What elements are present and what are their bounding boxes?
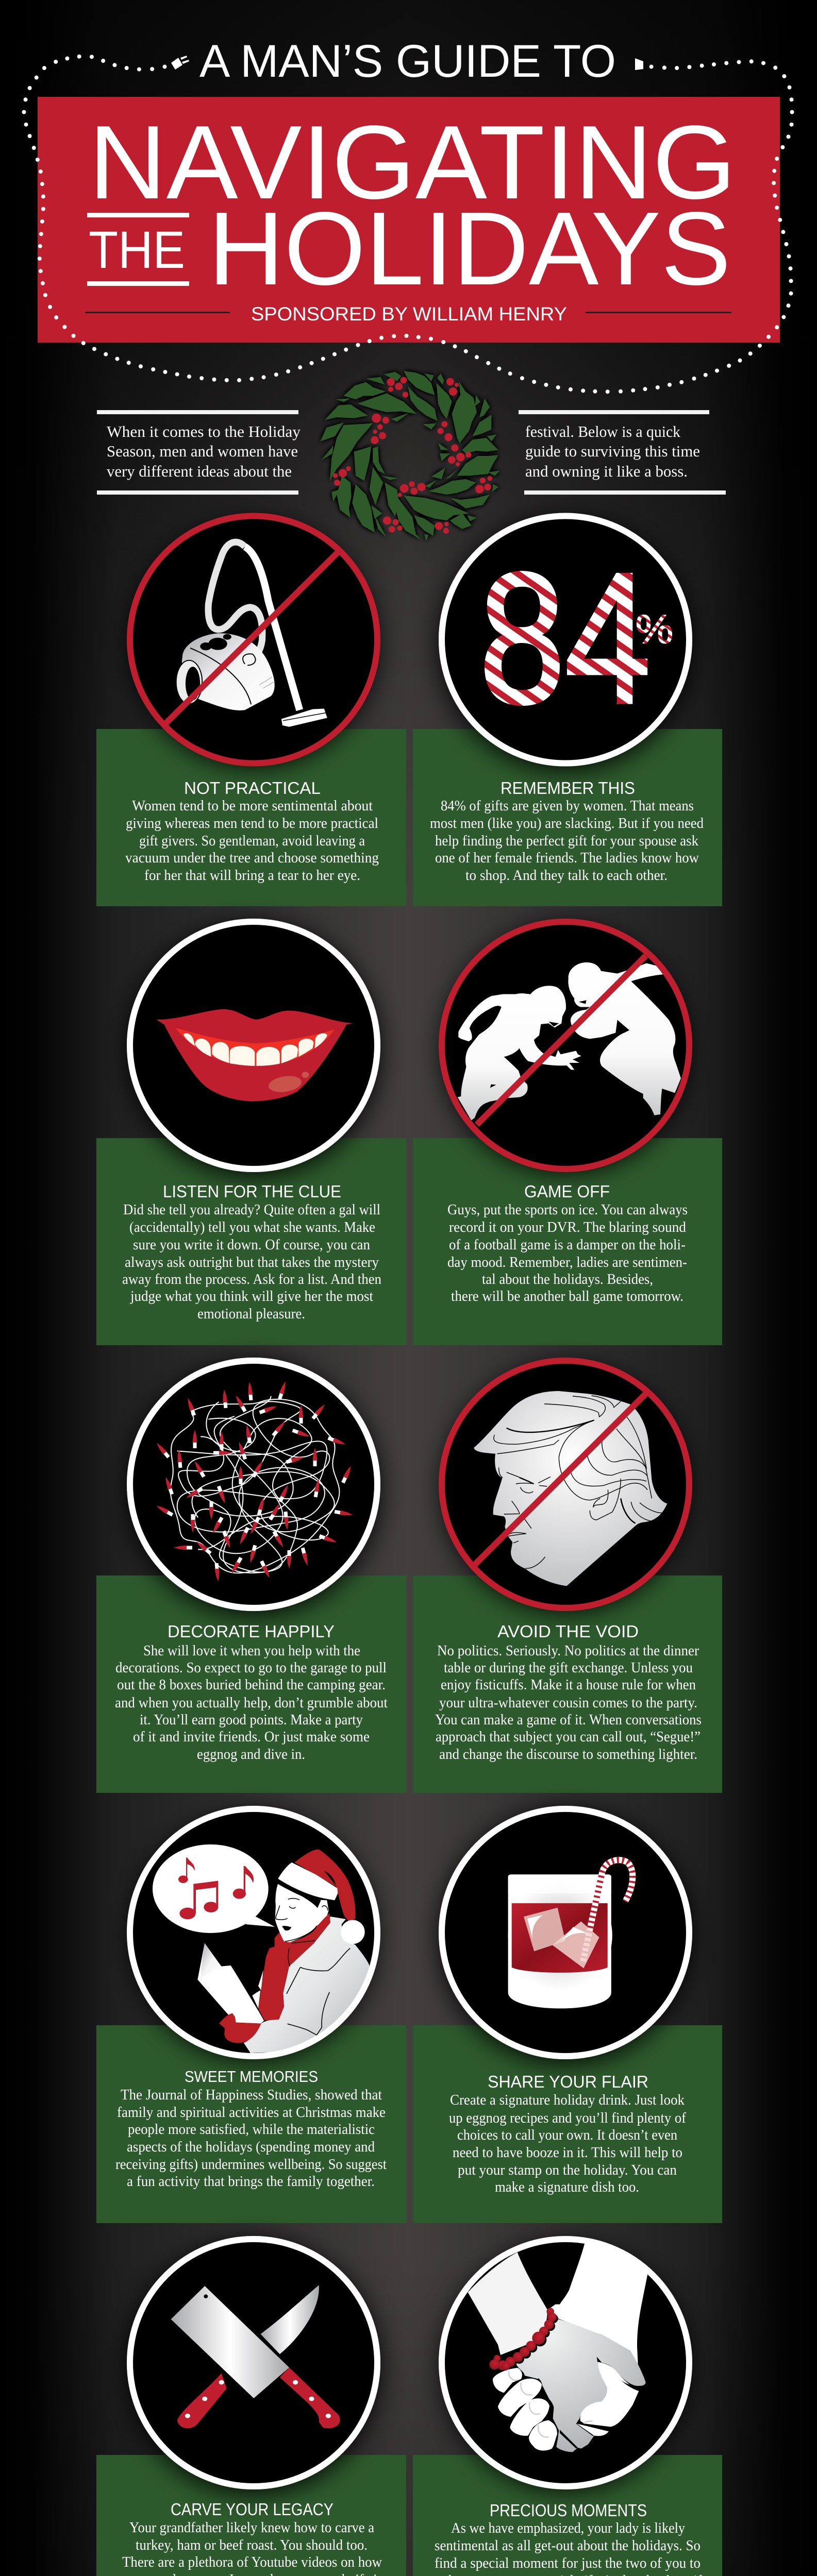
body text: 84% of gifts are given by women. That means bbox=[441, 798, 694, 814]
body text: emotional pleasure. bbox=[197, 1306, 305, 1322]
body text bbox=[125, 798, 379, 884]
body text bbox=[115, 2087, 387, 2190]
body text: of a football game is a damper on the holi- bbox=[449, 1236, 686, 1253]
coat bbox=[244, 1917, 370, 2053]
card background bbox=[96, 1575, 406, 1793]
sponsor line bbox=[85, 303, 731, 325]
heading: DECORATE HAPPILY bbox=[168, 1622, 335, 1641]
title: the: THE bbox=[89, 221, 185, 279]
body text: Women tend to be more sentimental about bbox=[132, 798, 373, 814]
song book bbox=[197, 1943, 264, 2024]
heading: LISTEN FOR THE CLUE bbox=[163, 1182, 341, 1201]
heading: NOT PRACTICAL bbox=[184, 778, 321, 798]
heading: PRECIOUS MOMENTS bbox=[490, 2501, 647, 2520]
body text: You can make a game of it. When conversations bbox=[435, 1711, 702, 1728]
intro text left: Season, men and women have bbox=[107, 442, 298, 460]
panel: precious moments bbox=[413, 2239, 722, 2576]
body text: There are a plethora of Youtube videos on how bbox=[122, 2554, 382, 2570]
body text: help finding the perfect gift for your spouse ask bbox=[435, 833, 698, 849]
icon: red lips bbox=[130, 922, 377, 1169]
body text bbox=[447, 1201, 688, 1304]
body text: need to have booze in it. This will help to bbox=[453, 2144, 682, 2161]
fingers bbox=[518, 2368, 558, 2448]
card background bbox=[96, 2455, 406, 2576]
bracelet bbox=[489, 2308, 558, 2370]
body text: sure you write it down. Of course, you can bbox=[133, 1236, 370, 1253]
heading: SWEET MEMORIES bbox=[185, 2067, 318, 2086]
icon: tangled lights bbox=[130, 1361, 377, 1608]
body text: aspects of the holidays (spending money and bbox=[127, 2139, 375, 2155]
body text bbox=[122, 1201, 381, 1322]
title: holidays: HOLIDAYS bbox=[208, 190, 731, 307]
panel: avoid the void bbox=[413, 1361, 722, 1793]
body text: table or during the gift exchange. Unless you bbox=[444, 1659, 693, 1676]
body text: find a special moment for just the two of you to bbox=[435, 2555, 701, 2571]
heading: AVOID THE VOID bbox=[497, 1622, 639, 1641]
card background bbox=[96, 1138, 406, 1345]
body text: Create a signature holiday drink. Just look bbox=[450, 2092, 685, 2108]
hat bbox=[294, 1850, 356, 1921]
panel: share your flair bbox=[413, 1809, 722, 2223]
bulbs bbox=[155, 1381, 353, 1582]
wreath bbox=[321, 371, 500, 541]
body text: No politics. Seriously. No politics at the dinner bbox=[437, 1642, 699, 1659]
body text: away from the process. Ask for a list. And then bbox=[122, 1271, 381, 1287]
intro text right: guide to surviving this time bbox=[525, 442, 700, 460]
body text bbox=[121, 2519, 382, 2576]
body text: giving whereas men tend to be more practical bbox=[126, 815, 378, 832]
body text: approach that subject you can call out, “Segue!” bbox=[436, 1728, 701, 1745]
body text: and change the discourse to something lighter. bbox=[439, 1746, 697, 1762]
body text: put your stamp on the holiday. You can bbox=[458, 2162, 677, 2178]
body text: day mood. Remember, ladies are sentimen- bbox=[447, 1254, 687, 1270]
heading: a man's guide to: A MAN’S GUIDE TO bbox=[199, 35, 616, 87]
body text: decorations. So expect to go to the garage to pull bbox=[115, 1659, 387, 1676]
body text: always ask outright but that takes the mystery bbox=[125, 1254, 379, 1270]
body text: Guys, put the sports on ice. You can always bbox=[447, 1201, 688, 1218]
body text bbox=[115, 1642, 388, 1762]
body text: a fun activity that brings the family together. bbox=[127, 2173, 375, 2190]
body text bbox=[435, 1642, 702, 1762]
body text bbox=[430, 798, 704, 884]
icon: prohibited politician profile bbox=[442, 1361, 689, 1608]
body text: Did she tell you already? Quite often a gal will bbox=[123, 1201, 380, 1218]
body text: most men (like you) are slacking. But if you need bbox=[430, 815, 704, 832]
icon: caroling man bbox=[130, 1809, 377, 2056]
intro text right: festival. Below is a quick bbox=[525, 422, 680, 440]
intro text left bbox=[97, 410, 301, 495]
card background bbox=[413, 729, 722, 906]
body text: Your grandfather likely knew how to carve a bbox=[129, 2519, 374, 2536]
icon: 84 percent candy cane: % bbox=[636, 606, 673, 652]
icon: prohibited football players bbox=[442, 922, 689, 1169]
body text: turkey, ham or beef roast. You should too. bbox=[136, 2537, 368, 2553]
body text: make a signature dish too. bbox=[495, 2179, 639, 2195]
body text: She will love it when you help with the bbox=[143, 1642, 360, 1659]
panel: listen for the clue bbox=[96, 922, 406, 1345]
body text bbox=[429, 2520, 706, 2576]
panel: not practical bbox=[96, 516, 406, 906]
icon: left plug bbox=[171, 56, 189, 70]
body text: out the 8 boxes buried behind the camping gear. bbox=[117, 1676, 386, 1693]
body text: your ultra-whatever cousin comes to the party. bbox=[439, 1694, 697, 1711]
card background bbox=[96, 729, 406, 906]
panel: sweet memories bbox=[96, 1809, 406, 2223]
body text: receiving gifts) undermines wellbeing. So suggest bbox=[115, 2156, 387, 2173]
body text: vacuum under the tree and choose something bbox=[125, 850, 379, 866]
icon: crossed knives bbox=[130, 2239, 377, 2486]
heading: CARVE YOUR LEGACY bbox=[171, 2500, 334, 2519]
body text: to shop. And they talk to each other. bbox=[465, 867, 668, 884]
face bbox=[275, 1884, 329, 1942]
body text: there will be another ball game tomorrow. bbox=[451, 1288, 683, 1304]
body text: one of her female friends. The ladies know how bbox=[435, 850, 699, 866]
mitten bbox=[219, 2013, 261, 2043]
icon: 84 percent candy cane: 84 bbox=[479, 535, 651, 742]
berries bbox=[333, 377, 492, 534]
icon: holiday drink bbox=[442, 1809, 689, 2056]
body text: record it on your DVR. The blaring sound bbox=[449, 1219, 686, 1235]
scarf bbox=[258, 1913, 330, 2021]
card background bbox=[413, 1138, 722, 1345]
title: navigating: NAVIGATING bbox=[89, 104, 736, 221]
body text bbox=[449, 2092, 686, 2195]
panel: decorate happily bbox=[96, 1361, 406, 1793]
body text: (accidentally) tell you what she wants. Make bbox=[129, 1219, 375, 1235]
body text: gift givers. So gentleman, avoid leaving a bbox=[139, 833, 365, 849]
intro text right bbox=[519, 410, 726, 495]
body text: The Journal of Happiness Studies, showed that bbox=[121, 2087, 382, 2103]
body text: and when you actually help, don’t grumble about bbox=[115, 1694, 388, 1711]
card background bbox=[413, 2025, 722, 2223]
card background bbox=[413, 1575, 722, 1793]
panel: carve your legacy bbox=[96, 2239, 406, 2576]
card background bbox=[413, 2455, 722, 2576]
body text: enjoy fisticuffs. Make it a house rule for when bbox=[441, 1676, 696, 1693]
sponsor line: SPONSORED BY WILLIAM HENRY bbox=[251, 303, 567, 325]
body text: it. You’ll earn good points. Make a party bbox=[140, 1711, 363, 1728]
heading: REMEMBER THIS bbox=[501, 778, 635, 798]
panel: game off bbox=[413, 922, 722, 1345]
string of lights dots with plugs bbox=[24, 56, 792, 392]
icon: prohibited vacuum bbox=[130, 516, 377, 764]
icon: 84 percent candy cane bbox=[442, 516, 689, 764]
panel: remember this bbox=[413, 516, 722, 906]
card background bbox=[96, 2025, 406, 2223]
body text: family and spiritual activities at Christmas make bbox=[117, 2104, 386, 2121]
intro text left: When it comes to the Holiday bbox=[107, 422, 301, 440]
body text: people more satisfied, while the materialistic bbox=[128, 2121, 375, 2138]
body text: choices to call your own. It doesn’t even bbox=[457, 2127, 677, 2143]
body text: of it and invite friends. Or just make some bbox=[133, 1728, 370, 1745]
icon: holding hands bbox=[442, 2239, 689, 2486]
icon: right plug bbox=[635, 58, 643, 70]
body text: up eggnog recipes and you’ll find plenty of bbox=[449, 2110, 686, 2126]
body text: judge what you think will give her the most bbox=[130, 1288, 373, 1304]
body text: As we have emphasized, your lady is likely bbox=[451, 2520, 685, 2536]
intro text left: very different ideas about the bbox=[107, 462, 292, 480]
heading: GAME OFF bbox=[524, 1182, 610, 1201]
speech bubble with notes bbox=[153, 1844, 275, 1933]
body text: eggnog and dive in. bbox=[197, 1746, 305, 1762]
title banner bbox=[38, 97, 780, 343]
body text: sentimental as all get-out about the holidays. So bbox=[435, 2537, 701, 2554]
intro text right: and owning it like a boss. bbox=[525, 462, 688, 480]
body text: for her that will bring a tear to her eye. bbox=[144, 867, 360, 884]
body text: tal about the holidays. Besides, bbox=[482, 1271, 653, 1287]
heading: SHARE YOUR FLAIR bbox=[488, 2072, 648, 2091]
